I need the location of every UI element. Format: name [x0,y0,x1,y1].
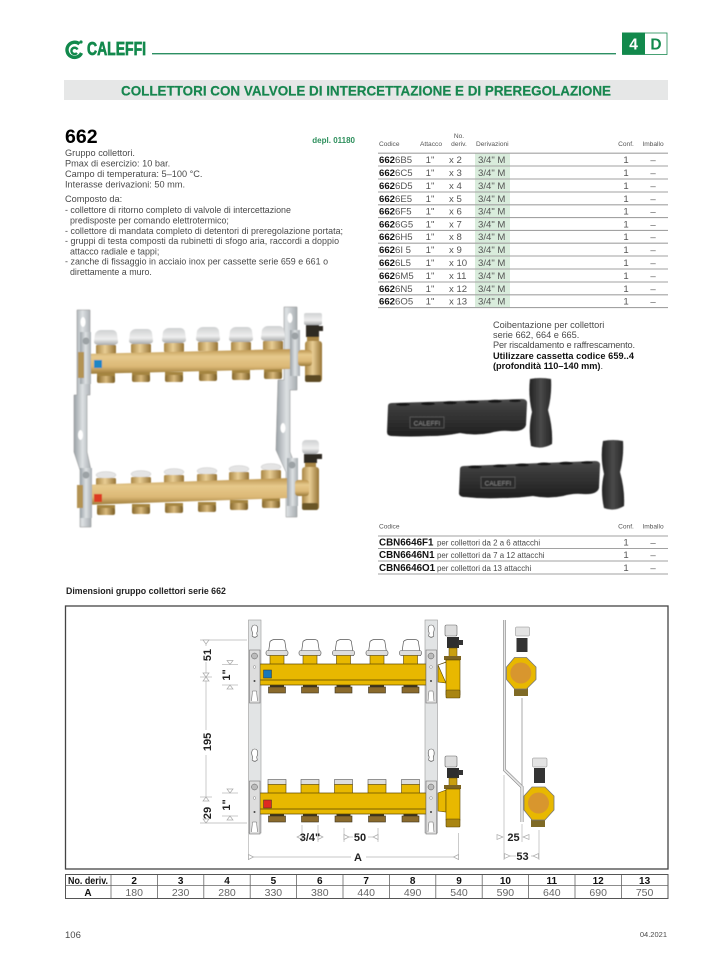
title band [64,80,668,100]
table rows: 1 [623,168,629,179]
side bracket [504,620,522,822]
dimension 195: 195 [202,733,214,751]
table rows: 6626I 5 [379,245,411,256]
header rule [152,53,616,54]
section tab 4 D: D [650,36,662,54]
row: A: 330 [265,887,282,899]
table header [379,133,664,148]
dimensions heading: Dimensioni gruppo collettori serie 662 [66,586,226,596]
table rows [379,155,656,308]
table rows: 1 [623,297,629,308]
table rows: x 9 [449,245,462,256]
row: No. deriv.: 6 [317,876,323,887]
product specifications: Interasse derivazioni: 50 mm. [65,180,185,190]
insulation description: serie 662, 664 e 665. [493,330,579,340]
table rows: 1 [623,258,629,269]
table rows: 6626N5 [379,284,413,295]
table rows: 6626F5 [379,207,412,218]
table rows: x 6 [449,207,462,218]
table rows: 1 [623,271,629,282]
table rows: 3/4" M [478,258,505,269]
row: A: 590 [497,887,514,899]
row: No. deriv. [68,876,651,887]
dimension 50: 50 [354,832,366,844]
table rows: 1" [426,232,434,243]
side dimensions [497,775,539,863]
table rows: 6626E5 [379,194,412,205]
row: No. deriv.: No. deriv. [68,876,108,887]
vertical dimensions [200,640,247,823]
row: No. deriv.: 4 [224,876,230,887]
table rows: 1" [426,245,434,256]
dimension 53: 53 [516,851,529,863]
side view drawing [497,620,554,863]
table rows: x 2 [449,155,462,166]
table rows: – [650,245,656,256]
composition list: predisposte per comando elettrotermico; [70,216,229,226]
front view drawing [248,620,463,834]
row: No. deriv.: 10 [500,876,511,887]
logo wordmark: CALEFFI [87,38,146,59]
row CBN6646O1: – [650,563,656,574]
row: A: 640 [543,887,561,899]
table rows: 1 [623,245,629,256]
logo: Caleffi [67,38,146,59]
row CBN6646F1: 1 [623,538,629,548]
table rows: – [650,258,656,269]
insulation shell 2 [459,440,624,510]
table header: Imballo [642,141,664,148]
table rows: – [650,207,656,218]
table rows: x 7 [449,219,462,230]
table rows: x 13 [449,297,467,308]
table rows: – [650,284,656,295]
table rows: 3/4" M [478,219,505,230]
mounting plates [248,620,438,833]
insulation table header: Codice [379,524,400,530]
table header: Derivazioni [476,141,509,148]
row: A: 690 [589,887,607,899]
table rows: 1 [623,219,629,230]
table rows: 6626B5 [379,155,412,166]
deposit reference: depl. 01180 [312,136,356,145]
table rows: 1" [426,168,434,179]
section tab 4 D [622,32,667,54]
row CBN6646N1: – [650,550,656,561]
row: A: 380 [311,887,329,899]
row CBN6646F1: – [650,538,656,548]
table header: Attacco [420,141,442,148]
dimension 25: 25 [507,832,520,844]
section tab 4 D: 4 [629,36,638,54]
table rows: 6626C5 [379,168,413,179]
insulation description: (profondità 110–140 mm). [493,361,603,371]
row: A: 440 [357,887,375,899]
table rows: 1" [426,271,434,282]
table rows: x 11 [449,271,466,282]
table rows: 3/4" M [478,207,505,218]
plate clamps [250,650,436,834]
table rows: 1" [426,258,434,269]
row: A: 230 [172,887,190,899]
table rows: 3/4" M [478,271,505,282]
row CBN6646F1 [379,538,656,548]
composition list: - collettore di mandata completo di detentori di preregolazione portata; [65,226,343,236]
row CBN6646N1 [379,550,656,561]
top valve drawing [438,625,463,698]
dimension 1 inch bottom: 1" [221,799,233,811]
composition list: Composto da: [65,194,122,204]
row: No. deriv.: 2 [131,876,137,887]
table rows: – [650,168,656,179]
table rows: 3/4" M [478,181,505,192]
table rows: x 12 [449,284,467,295]
row CBN6646N1: 1 [623,550,629,561]
table header: Conf. [618,141,634,148]
top manifold [82,326,291,383]
composition list: direttamente a muro. [70,267,152,277]
table header: No. [454,133,464,140]
table rows: 1" [426,297,434,308]
insulation description: Coibentazione per collettori [493,320,604,330]
insulation description: Utilizzare cassetta codice 659..4 [493,351,635,361]
composition list [65,194,343,277]
page number: 106 [65,930,81,941]
table rows: x 5 [449,194,462,205]
table rows: 1" [426,181,434,192]
date: 04.2021 [640,930,667,939]
green highlight column [475,153,510,307]
table rows: 6626M5 [379,271,414,282]
table rows: 3/4" M [478,284,505,295]
top air vent valve [298,313,323,382]
dimension 1 inch top: 1" [221,669,233,681]
row: No. deriv.: 13 [639,876,651,887]
dimension 3/4 inch: 3/4" [300,832,320,844]
composition list: - collettore di ritorno completo di valvole di intercettazione [65,205,291,215]
insulation description [493,320,635,371]
bottom manifold [82,464,291,515]
dimension 29: 29 [202,807,214,819]
product specifications: Gruppo collettori. [65,148,135,158]
table rows: 3/4" M [478,232,505,243]
insulation table header: Conf. [618,524,634,530]
side valve bottom [524,758,554,827]
table header: Codice [379,141,400,148]
product photo: insulation shells [387,378,624,510]
row: No. deriv.: 8 [410,876,416,887]
table rows: – [650,194,656,205]
table rows: 1 [623,207,629,218]
row: A: 540 [450,887,468,899]
table rows: 6626G5 [379,219,413,230]
row CBN6646F1: per collettori da 2 a 6 attacchi [437,538,540,548]
product photo: brass manifold assembly [74,307,323,527]
left bracket [74,310,91,527]
table rows: 6626O5 [379,297,413,308]
insulation shell 1: CALEFFI [414,420,441,428]
row: A: A [84,888,92,899]
dimensions panel frame [66,606,668,869]
product specifications: Campo di temperatura: 5–100 °C. [65,169,202,179]
top manifold drawing [260,640,426,693]
insulation description: Per riscaldamento e raffrescamento. [493,340,635,350]
table rows: 1 [623,284,629,295]
table rows: – [650,232,656,243]
bottom manifold drawing [260,780,426,822]
table rows: 6626D5 [379,181,413,192]
table rows: 3/4" M [478,194,505,205]
table rows: 6626L5 [379,258,411,269]
table rows: – [650,219,656,230]
table rows: 1 [623,181,629,192]
icon dot [79,40,83,44]
row CBN6646O1: per collettori da 13 attacchi [437,564,532,573]
table rows: – [650,155,656,166]
bottom air vent valve [295,440,322,510]
row CBN6646O1: 1 [623,563,629,574]
side valve top [506,627,536,696]
row: No. deriv.: 7 [363,876,369,887]
table rows: 1" [426,219,434,230]
table rows: – [650,181,656,192]
row: No. deriv.: 11 [547,876,558,887]
table rows: – [650,297,656,308]
bracket clamps [77,330,300,518]
bottom valve drawing [438,756,463,827]
row CBN6646N1: per collettori da 7 a 12 attacchi [437,551,545,560]
table header: deriv. [451,141,467,148]
icon: Caleffi symbol [67,42,82,57]
composition list: - zanche di fissaggio in acciaio inox per cassette serie 659 e 661 o [65,256,328,266]
row: A: 750 [636,887,654,899]
row CBN6646F1: CBN6646F1 [379,538,434,548]
row: No. deriv.: 9 [456,876,462,887]
table rows: x 3 [449,168,462,179]
table: insulation codes [378,524,668,574]
row: No. deriv.: 5 [271,876,277,887]
insulation table header: Imballo [642,524,664,530]
row: No. deriv.: 3 [178,876,184,887]
row CBN6646O1 [379,563,656,574]
table rows: 3/4" M [478,245,505,256]
table rows: – [650,271,656,282]
dimension 51: 51 [202,649,214,661]
insulation shell 1 [387,378,552,448]
table: dimension A by number of branches [66,874,668,899]
right bracket [276,307,297,517]
table rows: 1" [426,155,434,166]
product specifications: Pmax di esercizio: 10 bar. [65,158,170,168]
product code heading: 662 [65,126,98,148]
table rows: x 8 [449,232,462,243]
composition list: - gruppi di testa composti da rubinetti di sfogo aria, raccordi a doppio [65,236,339,246]
table rows: 1 [623,232,629,243]
row: A: 280 [218,887,236,899]
insulation shell 2: CALEFFI [485,480,512,488]
table rows: 1" [426,194,434,205]
row CBN6646O1: CBN6646O1 [379,563,436,574]
dimension A: A [354,852,362,864]
table rows: x 4 [449,181,462,192]
row CBN6646N1: CBN6646N1 [379,550,435,561]
table rows: 1 [623,155,629,166]
product specifications [65,148,202,190]
table rows: 1 [623,194,629,205]
table rows: 3/4" M [478,297,505,308]
table rows: 1" [426,284,434,295]
insulation table header [379,524,664,530]
row: No. deriv.: 12 [593,876,604,887]
composition list: attacco radiale e tappi; [70,246,159,256]
title band: COLLETTORI CON VALVOLE DI INTERCETTAZIONE E DI PREREGOLAZIONE [121,82,611,98]
table rows: x 10 [449,258,467,269]
table rows: 3/4" M [478,168,505,179]
table: product codes [378,133,668,308]
table rows: 3/4" M [478,155,505,166]
horizontal dimensions [248,825,458,864]
table rows: 6626H5 [379,232,413,243]
row: A: 490 [404,887,422,899]
row: A [84,887,654,899]
row: A: 180 [125,887,143,899]
table rows: 1" [426,207,434,218]
